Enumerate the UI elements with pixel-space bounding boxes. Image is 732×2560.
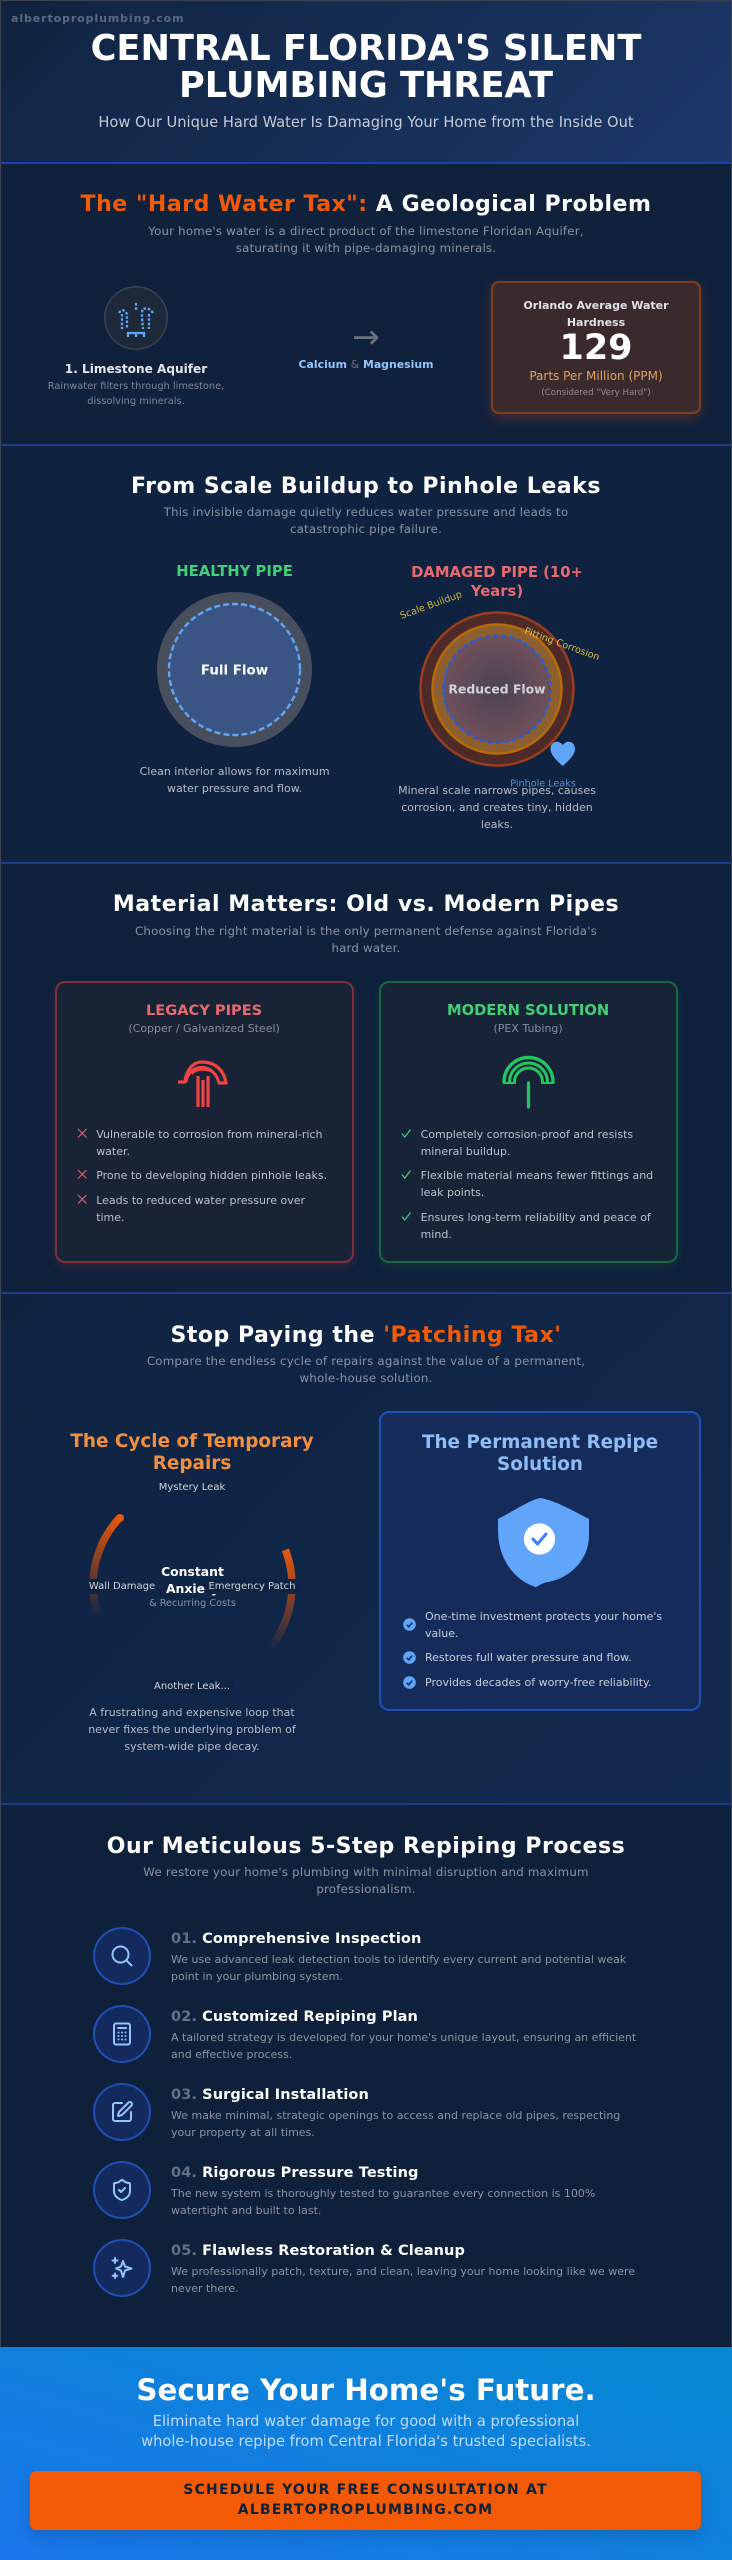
title: CENTRAL FLORIDA'S SILENT [91, 28, 641, 68]
intro text [164, 504, 568, 536]
panel: patching tax [0, 1294, 732, 1805]
icon: sparkles [93, 2239, 151, 2297]
healthy pipe diagram [157, 592, 312, 747]
cycle caption: system-wide pipe decay. [124, 1740, 260, 1752]
stat unit: Parts Per Million (PPM) [529, 369, 663, 383]
step label: 1. Limestone Aquifer [65, 362, 207, 376]
modern subtitle: (PEX Tubing) [493, 1022, 563, 1035]
step 2 description: and effective process. [171, 2048, 292, 2061]
intro text [143, 1864, 589, 1896]
damaged pipe diagram: Pinhole Leaks [510, 778, 576, 790]
label: wall damage: Wall Damage [89, 1581, 155, 1592]
stat title [523, 298, 669, 328]
card title: Solution [497, 1454, 583, 1475]
bullet: reliability [402, 1210, 651, 1240]
step 3 [93, 2083, 620, 2141]
icon: search [93, 1927, 151, 1985]
cycle heading [70, 1431, 314, 1474]
card: modern solution [379, 981, 678, 1263]
icon: calculator [93, 2005, 151, 2063]
intro text: whole-house solution. [299, 1370, 433, 1384]
bullet: one-time investment [403, 1610, 662, 1640]
cycle diagram [89, 1514, 296, 1648]
intro text: Your home's water is a direct product of the limestone Floridan Aquifer, [148, 224, 584, 238]
healthy pipe caption: water pressure and flow. [167, 782, 302, 794]
bullet: flexible: leak points. [421, 1186, 484, 1198]
bullet: reduced pressure [78, 1194, 305, 1224]
cta text: whole-house repipe from Central Florida's trusted specialists. [141, 2433, 591, 2450]
bullet: restores pressure: Restores full water pressure and flow. [425, 1650, 632, 1664]
label: another leak: Another Leak... [154, 1680, 230, 1692]
healthy pipe diagram: Full Flow [201, 663, 268, 678]
stat number: 129 [559, 328, 633, 368]
healthy pipe caption: Clean interior allows for maximum [140, 764, 330, 778]
intro text: Compare the endless cycle of repairs against the value of a permanent, [147, 1354, 585, 1368]
modern title: MODERN SOLUTION [447, 1002, 609, 1019]
step description [48, 381, 224, 406]
step 5 [93, 2239, 653, 2297]
icon: shield [498, 1498, 589, 1587]
center text [161, 1564, 224, 1596]
intro text [147, 1354, 585, 1384]
label: emergency patch: Emergency Patch [208, 1581, 296, 1592]
center subtext: & Recurring Costs [149, 1598, 236, 1609]
bullet: flexible [402, 1168, 653, 1198]
arrow: → [352, 317, 380, 356]
panel: 5-step process [0, 1805, 732, 2347]
healthy pipe caption [140, 764, 330, 794]
step 5 title: 05. Flawless Restoration & Cleanup [171, 2243, 465, 2259]
icon: shield check [93, 2161, 151, 2219]
header panel [0, 0, 732, 164]
bullet: corrosion proof: mineral buildup. [421, 1144, 510, 1158]
cycle caption [88, 1706, 296, 1752]
heading: From Scale Buildup to Pinhole Leaks [131, 474, 601, 498]
damaged pipe diagram [399, 590, 601, 790]
heading: Material Matters: Old vs. Modern Pipes [113, 892, 619, 917]
stat card: water hardness [491, 281, 701, 414]
intro text: catastrophic pipe failure. [290, 522, 442, 536]
bullet: flexible: Flexible material means fewer fittings and [421, 1168, 653, 1182]
step 1 description: point in your plumbing system. [171, 1970, 343, 1983]
damaged pipe caption [398, 784, 596, 830]
step 4 [93, 2161, 653, 2219]
step 2 title: 02. Customized Repiping Plan [171, 2009, 418, 2025]
bullet: corrosion: Vulnerable to corrosion from mineral-rich [96, 1128, 322, 1140]
card title: The Permanent Repipe [422, 1432, 658, 1453]
damaged pipe caption: corrosion, and creates tiny, hidden [401, 800, 593, 814]
legacy title: LEGACY PIPES [146, 1002, 262, 1019]
label: emergency patch [204, 1579, 300, 1594]
step 4 description: The new system is thoroughly tested to guarantee every connection is 100% [171, 2187, 595, 2200]
intro text [148, 224, 584, 254]
step 2 [93, 2005, 636, 2063]
step 1 description [171, 1953, 626, 1983]
damaged pipe diagram: Scale Buildup [399, 590, 464, 622]
step 3 description: your property at all times. [171, 2126, 315, 2139]
legacy subtitle: (Copper / Galvanized Steel) [128, 1022, 280, 1035]
damaged pipe caption: leaks. [481, 818, 513, 830]
minerals label: Calcium & Magnesium [299, 358, 433, 371]
bullet: corrosion proof: Completely corrosion-proof and resists [421, 1128, 633, 1140]
cycle caption: never fixes the underlying problem of [88, 1722, 296, 1736]
intro text: Choosing the right material is the only permanent defense against Florida's [135, 924, 597, 938]
damaged pipe label: Years) [471, 582, 523, 600]
step 3 title: 03. Surgical Installation [171, 2087, 369, 2103]
damaged pipe diagram: Pitting Corrosion [523, 626, 601, 663]
step 5 description: never there. [171, 2282, 239, 2295]
step 3 description [171, 2107, 620, 2141]
label: another leak [150, 1678, 234, 1694]
bullet: reduced pressure: time. [96, 1210, 125, 1224]
panel: material comparison [0, 864, 732, 1294]
subtitle: How Our Unique Hard Water Is Damaging Your Home from the Inside Out [98, 114, 634, 131]
panel: scale buildup to pinhole leaks [0, 446, 732, 864]
bullet: pinhole leaks: Prone to developing hidden pinhole leaks. [96, 1168, 327, 1182]
title: PLUMBING THREAT [179, 64, 553, 106]
step 2 description [171, 2031, 636, 2061]
center text: Constant [161, 1564, 224, 1578]
step 1 description: We use advanced leak detection tools to identify every current and potential weak [171, 1953, 626, 1966]
intro text [135, 924, 597, 954]
card: permanent repipe [379, 1411, 701, 1711]
watermark domain: albertoproplumbing.com [11, 12, 184, 25]
stat title: Hardness [567, 316, 625, 328]
cta text [0, 2412, 732, 2451]
card: legacy pipes [55, 981, 354, 1263]
cycle ring [90, 1515, 296, 1648]
damaged pipe diagram: Reduced Flow [448, 682, 546, 696]
step 4 description [171, 2185, 595, 2219]
bullet: one-time investment: value. [425, 1626, 459, 1640]
bullet: reliability: mind. [421, 1228, 452, 1240]
cta button [30, 2471, 701, 2530]
title [91, 28, 642, 106]
step description: Rainwater filters through limestone, [48, 381, 224, 392]
panel: call to action [0, 2347, 732, 2560]
intro text: This invisible damage quietly reduces water pressure and leads to [164, 504, 568, 518]
cycle heading: The Cycle of Temporary [70, 1431, 314, 1452]
step 2 description: A tailored strategy is developed for your home's unique layout, ensuring an efficient [171, 2031, 636, 2044]
heading: Stop Paying the 'Patching Tax' [170, 1323, 562, 1348]
stat note: (Considered "Very Hard") [541, 388, 651, 398]
bullet: corrosion [78, 1128, 322, 1158]
bullet: reduced pressure: Leads to reduced water pressure over [96, 1194, 305, 1206]
step description: dissolving minerals. [87, 396, 185, 406]
bullet: corrosion proof [402, 1128, 633, 1158]
damaged pipe label [411, 564, 583, 600]
label: wall damage [85, 1579, 159, 1594]
panel: hard water tax [0, 164, 732, 446]
damaged pipe caption: Mineral scale narrows pipes, causes [398, 784, 596, 796]
step 1 title: 01. Comprehensive Inspection [171, 1931, 421, 1947]
bullet: reliability: Provides decades of worry-free reliability. [425, 1676, 651, 1688]
step 1 [93, 1927, 626, 1985]
icon: pex tubing [502, 1056, 555, 1109]
stat title: Orlando Average Water [523, 298, 669, 312]
step 4 description: watertight and built to last. [171, 2204, 321, 2217]
cycle heading: Repairs [153, 1453, 231, 1474]
damaged pipe label: DAMAGED PIPE (10+ [411, 564, 583, 580]
label: mystery leak: Mystery Leak [159, 1482, 225, 1492]
icon: corroded pipe [178, 1060, 228, 1107]
button label: SCHEDULE YOUR FREE CONSULTATION AT [183, 2482, 548, 2498]
cycle caption: A frustrating and expensive loop that [89, 1706, 295, 1718]
step 5 description: We professionally patch, texture, and clean, leaving your home looking like we were [171, 2265, 635, 2278]
card title [422, 1432, 658, 1475]
bullet: one-time investment: One-time investment protects your home's [425, 1610, 662, 1622]
intro text: We restore your home's plumbing with minimal disruption and maximum [143, 1864, 589, 1878]
cta heading: Secure Your Home's Future. [136, 2373, 596, 2407]
step 5 description [171, 2263, 635, 2297]
cta text: Eliminate hard water damage for good with a professional [153, 2413, 579, 2430]
label: mystery leak [155, 1480, 229, 1494]
step 3 description: We make minimal, strategic openings to access and replace old pipes, respecting [171, 2109, 620, 2122]
button label [30, 2480, 701, 2520]
heading: The "Hard Water Tax": A Geological Problem [81, 192, 651, 217]
intro text: saturating it with pipe-damaging minerals. [236, 240, 496, 254]
heading: Our Meticulous 5-Step Repiping Process [107, 1834, 625, 1859]
button label: ALBERTOPROPLUMBING.COM [238, 2502, 493, 2518]
intro text: hard water. [331, 940, 401, 954]
center text: Anxiety [166, 1580, 219, 1596]
bullet: corrosion: water. [96, 1144, 130, 1158]
intro text: professionalism. [316, 1882, 416, 1896]
bullet: reliability: Ensures long-term reliability and peace of [421, 1210, 651, 1224]
healthy pipe label: HEALTHY PIPE [176, 563, 293, 580]
icon: limestone aquifer [104, 286, 168, 350]
ring cap [116, 1514, 124, 1522]
step 4 title: 04. Rigorous Pressure Testing [171, 2165, 419, 2181]
icon: edit [93, 2083, 151, 2141]
